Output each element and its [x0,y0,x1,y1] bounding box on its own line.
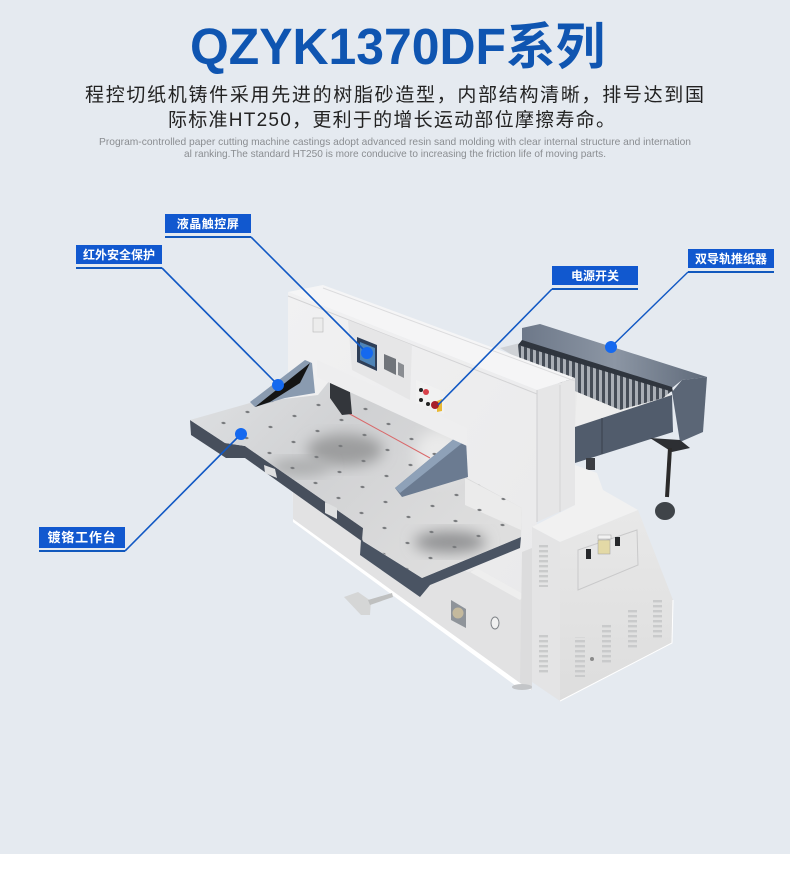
title: 系列 [506,19,605,75]
callout: 镀铬工作台 [39,428,247,552]
main column [288,285,575,688]
callout: 镀铬工作台: 镀铬工作台 [47,530,117,545]
machine illustration [180,285,707,701]
lower body [293,490,532,690]
callout: 红外安全保护: 红外安全保护 [83,247,155,262]
left safety guard [250,360,315,407]
subtitle Chinese: 际标准HT250，更利于的增长运动部位摩擦寿命。 [168,109,615,131]
title: QZYK1370DF [190,18,506,75]
subtitle English: al ranking.The standard HT250 is more conducive to increasing the friction life of moving parts. [184,148,606,160]
callout: 液晶触控屏: 液晶触控屏 [177,216,239,231]
callout: 液晶触控屏 [165,214,373,359]
callout: 双导轨推纸器 [605,249,774,353]
callout: 电源开关: 电源开关 [571,268,619,283]
callout: 红外安全保护 [76,245,284,391]
foot pedal [344,592,393,615]
subtitle Chinese [85,84,704,131]
LCD control panel [348,320,412,400]
power switch panel [416,380,445,414]
electrical cabinet [532,465,673,701]
callout: 双导轨推纸器: 双导轨推纸器 [695,251,767,266]
chrome worktable [190,382,522,597]
subtitle English: Program-controlled paper cutting machine castings adopt advanced resin sand molding with clear internal structure and internation [99,136,691,148]
paper pusher feeder [500,324,707,520]
callout: 电源开关 [438,266,638,405]
blade throat [317,360,467,446]
subtitle English [99,136,691,160]
right safety guard [395,438,468,497]
subtitle Chinese: 程控切纸机铸件采用先进的树脂砂造型，内部结构清晰，排号达到国 [85,84,704,106]
icon: warning plate [313,318,323,332]
